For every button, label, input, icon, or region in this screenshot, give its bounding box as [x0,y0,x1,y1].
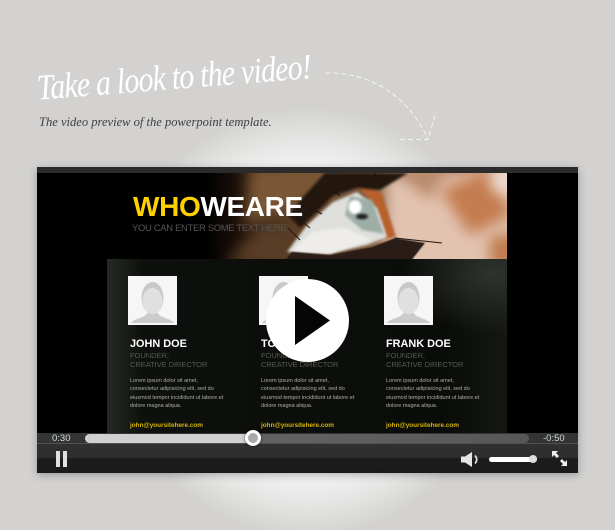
name and details: dolore magna aliqua. [386,403,437,409]
name and details: eiusmod tempor incididunt ut labore et [261,395,354,401]
icon: fullscreen [552,451,567,466]
team member: Tom [259,276,354,429]
video player [37,167,578,473]
title: Take a look to the video! [35,47,312,108]
name and details: FOUNDER, [386,351,425,360]
banner subheading: YOU CAN ENTER SOME TEXT HERE [132,222,286,233]
name and details: eiusmod tempor incididunt ut labore et [386,395,479,401]
name and details: CREATIVE DIRECTOR [261,360,338,369]
remaining time: -0:50 [543,433,565,444]
progress fill [85,434,253,443]
name and details: eiusmod tempor incididunt ut labore et [130,395,223,401]
name and details: dolore magna aliqua. [130,403,181,409]
icon: play button [266,279,349,362]
volume slider [489,457,537,462]
eye banner image [216,173,507,259]
top strip [37,167,578,173]
name and details: john@yoursitehere.com [130,422,203,429]
progress track [85,434,529,443]
icon: speaker [461,452,478,467]
name and details: john@yoursitehere.com [386,422,459,429]
avatar [384,276,433,325]
name and details: CREATIVE DIRECTOR [130,360,207,369]
icon: pause [56,451,67,467]
avatar [128,276,177,325]
name and details: FOUNDER, [261,351,300,360]
name and details [386,338,480,429]
name and details: consectetur adipisicing elit, sed do [130,386,214,392]
control bar [37,433,578,473]
elapsed time: 0:30 [52,433,70,444]
name and details: john@yoursitehere.com [261,422,334,429]
progress knob [245,430,261,446]
team member: Frank Doe [384,276,480,429]
name and details: JOHN DOE [130,338,187,350]
name and details: FOUNDER, [130,351,169,360]
team panel [107,259,507,433]
name and details: CREATIVE DIRECTOR [386,360,463,369]
name and details: dolore magna aliqua. [261,403,312,409]
name and details: TOM DOE [261,338,312,350]
name and details: Lorem ipsum dolor sit amet, [386,378,454,384]
name and details: consectetur adipisicing elit, sed do [386,386,470,392]
volume knob [529,455,537,463]
name and details [260,338,354,429]
avatar [259,276,308,325]
name and details: Lorem ipsum dolor sit amet, [130,378,198,384]
team member: John Doe [128,276,224,429]
arrow: dashed curve [325,72,436,140]
subtitle: The video preview of the powerpoint template. [39,115,272,129]
heading: who we are: WHOWEARE [133,191,303,222]
name and details: Lorem ipsum dolor sit amet, [261,378,329,384]
name and details: consectetur adipisicing elit, sed do [261,386,345,392]
name and details: FRANK DOE [386,338,451,350]
name and details [130,338,224,429]
